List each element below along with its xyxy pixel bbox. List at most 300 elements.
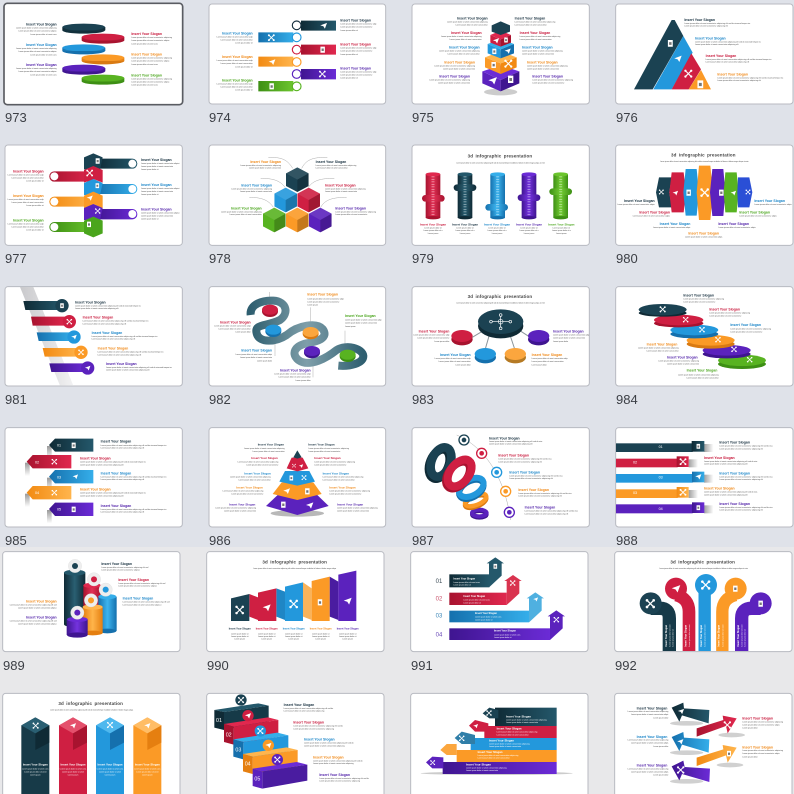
vertical column text: Lorem ipsum dolor sit amet [669, 624, 672, 647]
bar text: Lorem ipsum dolor sit [494, 636, 512, 639]
text blocks: Insert Your Slogan [509, 470, 540, 474]
left text blocks [215, 443, 285, 513]
text blocks: Insert Your Slogan [340, 43, 371, 47]
left text blocks: Insert Your Slogan [13, 194, 44, 198]
right text blocks: Insert Your Slogan [314, 456, 341, 460]
left text blocks: Lorem ipsum dolor sit amet consectetur adipiscing [628, 710, 668, 713]
right text blocks: Lorem ipsum dolor sit amet consectetur adipisc [131, 80, 170, 83]
subtitle: Lorem ipsum dolor sit amet consectetur adipiscing elit sed do eiusmod tempor incididunt ut labore et dolore magna aliqua ut enim [660, 160, 749, 163]
left text blocks [10, 600, 57, 625]
left text blocks: Lorem ipsum dolor sit amet consectetur adipiscing [16, 27, 57, 30]
slide 996: 3D arrows [615, 693, 792, 794]
right text blocks: Insert Your Slogan [101, 562, 132, 566]
left text blocks: Lorem ipsum dolor sit amet consectetur [246, 463, 279, 466]
left text blocks: Insert Your Slogan [250, 160, 281, 164]
text blocks: Lorem ipsum dolor sit amet consectetur adipiscing elit sed do [313, 759, 362, 762]
arrow shadows [670, 721, 745, 784]
slide 987: 3D rings [412, 428, 589, 527]
slide number captions: 976 [616, 110, 638, 125]
right text blocks: Lorem ipsum dolor sit amet consectetur adipiscing [520, 35, 560, 38]
right text blocks: Lorem ipsum dolor sit amet consectetur adipiscing [131, 36, 172, 39]
text blocks: Insert Your Slogan [92, 331, 122, 335]
right text blocks: Lorem ipsum dolor sit amet consectetur adipiscing [730, 327, 771, 330]
left text blocks: Insert Your Slogan [236, 485, 263, 489]
right text blocks: Lorem ipsum dolor sit amet consectetur adipisci [141, 211, 180, 214]
text blocks: Lorem ipsum dolor sit amet consectetur adipiscing elit sed do eiusmod tempor inc [75, 304, 141, 307]
right text blocks: Insert Your Slogan [730, 323, 761, 327]
right text blocks: Lorem ipsum dolor sit amet cons [131, 42, 158, 45]
columns [21, 717, 161, 794]
left text blocks: Lorem ipsum dolor sit amet consectetur adipiscing [244, 447, 285, 450]
left text blocks: Lorem ipsum dolor sit amet consectetur adipiscing [223, 490, 263, 493]
left text blocks: Insert Your Slogan [241, 349, 272, 353]
column text: Lorem ipsum [105, 775, 116, 777]
text blocks: Lorem ipsum dolor sit amet consectetur adipiscing elit sed do eiusmod tempor inc [717, 76, 783, 79]
text blocks: Lorem ipsum dolor sit amet consectetur adipiscing elit sed do eius [525, 510, 578, 513]
left text blocks: Lorem ipsum dolor sit amet consectetur adipiscing [16, 47, 57, 50]
left text blocks: Lorem ipsum dolor sit amet consectetur adipi [214, 324, 251, 327]
text blocks: Lorem ipsum dolor sit [340, 53, 358, 56]
text blocks: Lorem ipsum dolor sit amet consectetur adipiscing elit sed do [304, 742, 353, 745]
right text blocks: Lorem ipsum dolor [742, 728, 758, 730]
left text blocks: Insert Your Slogan [639, 211, 670, 215]
text blocks: Insert Your Slogan [484, 223, 510, 227]
right text blocks: Insert Your Slogan [329, 485, 356, 489]
right text blocks: Insert Your Slogan [308, 443, 335, 447]
slide 992: bent columns with circles [615, 552, 792, 652]
text blocks: Lorem ipsum dolor sit a [455, 229, 475, 232]
shadow [484, 89, 517, 95]
text blocks: Lorem ipsum dolor sit a [519, 229, 539, 232]
left text blocks: Lorem ipsum dolor sit amet consectetur adipis [653, 226, 690, 229]
bars [616, 441, 704, 513]
text blocks [684, 18, 783, 82]
left text blocks [16, 23, 57, 76]
blocks: 05 [254, 777, 260, 783]
slide number captions: 977 [5, 251, 27, 266]
text blocks: Lorem ipsum dolor sit amet consectetur [345, 322, 377, 325]
slide 991: up-arrow bars [411, 552, 588, 652]
left text blocks: Lorem ipsum dolor sit [26, 179, 44, 182]
left text blocks: Insert Your Slogan [231, 206, 262, 210]
title: 3d infographic presentation [58, 701, 123, 706]
left text blocks: Lorem ipsum dolor sit amet consectetur [253, 450, 285, 453]
text blocks: Lorem ipsum [556, 233, 567, 235]
left text blocks: Lorem ipsum dolor sit amet consectetur adipiscing [658, 359, 699, 362]
slide 973: stacked discs [4, 3, 183, 105]
right text blocks: Lorem ipsum dolor sit amet consectetur adipiscing [683, 298, 724, 301]
text blocks: Insert Your Slogan [489, 436, 520, 440]
left text blocks: Lorem ipsum dolor sit amet consectetur [687, 376, 719, 379]
left text blocks: Lorem ipsum dolor sit amet consectetur adipi [236, 353, 273, 356]
text blocks: Lorem ipsum dolor sit amet consectetur adipiscing elit [498, 460, 542, 463]
right text blocks: Lorem ipsum dolor sit amet consectetur adipis [718, 226, 756, 229]
row numbers: 01 [436, 579, 443, 585]
right text blocks: Lorem ipsum dolor sit amet consectetur adipis [739, 215, 777, 218]
right text blocks: Insert Your Slogan [532, 353, 562, 357]
bars: 02 [633, 460, 637, 464]
vertical column text: Lorem ipsum dolor sit amet [704, 624, 707, 647]
subtitle: Lorem ipsum dolor sit amet consectetur adipiscing elit sed do eiusmod tempor incididunt ut labore et dolore magna aliqua ut enim [456, 301, 546, 304]
column text: Lorem ipsum [30, 775, 41, 777]
left text blocks: Lorem ipsum dolor sit amet consectetur [221, 38, 253, 41]
right text blocks: Lorem ipsum dolor sit amet consectetur [329, 493, 362, 496]
text blocks: Insert Your Slogan [98, 347, 128, 351]
bar text: Lorem ipsum dolor sit amet cons [494, 633, 521, 636]
left text blocks: Insert Your Slogan [26, 616, 57, 620]
text blocks: Lorem ipsum dolor sit [520, 226, 538, 229]
slide number captions: 983 [412, 392, 434, 407]
text blocks: Lorem ipsum dolor sit amet consectetur adipiscing elit sed do eius [489, 440, 542, 443]
vertical column text: Insert Your Slogan [684, 624, 687, 647]
spokes [471, 331, 532, 350]
right text blocks: Lorem ipsum dolor sit amet consectetur adipiscing [742, 720, 783, 723]
column text: Lorem ipsum dolor sit amet cons [134, 767, 161, 770]
chain circles [292, 21, 301, 91]
text blocks: Lorem ipsum [345, 326, 356, 328]
vertical column text: Insert Your Slogan [665, 624, 668, 647]
slide 976: banded triangle [616, 4, 793, 104]
text blocks: Insert Your Slogan [684, 18, 715, 22]
text blocks: Lorem ipsum dolor sit amet consectetur [340, 26, 373, 29]
left text blocks: Insert Your Slogan [660, 222, 690, 226]
slide number captions: 988 [616, 533, 638, 548]
left text blocks: Lorem ipsum dolor sit amet consectetur adipiscing [628, 739, 668, 742]
columns [651, 590, 761, 651]
right text blocks: Lorem ipsum dolor sit amet consectetur [553, 337, 585, 340]
left text blocks: Lorem ipsum dolor sit amet consectetur adipiscing [638, 346, 679, 349]
column text: Lorem ipsum dolor sit amet cons [22, 767, 49, 770]
slide 975: stacked hexagonal boxes [412, 4, 589, 104]
text blocks: Insert Your Slogan [719, 502, 750, 506]
right text blocks: Insert Your Slogan [131, 73, 162, 77]
right text blocks: Insert Your Slogan [131, 53, 162, 57]
right text blocks: Lorem ipsum dolor sit amet consectetur adipiscing [131, 77, 172, 80]
text blocks: Lorem ipsum dolor sit amet consectetur adipiscing elit [101, 447, 145, 450]
left text blocks: Lorem ipsum dolor sit amet consectetur [450, 38, 482, 41]
subtitle: Lorem ipsum dolor sit amet consectetur adipiscing elit sed do eiusmod tempor incididunt ut labore et dolore magna aliqua ut enim [456, 162, 546, 165]
left text blocks [617, 199, 690, 229]
right text blocks [718, 199, 792, 229]
text blocks: Lorem ipsum dolor sit amet consectetur adipiscing elit sed do eiusmod tempor inc [106, 366, 172, 369]
slide 974: ribbons on a chain [209, 4, 386, 104]
vertical column text: Insert Your Slogan [718, 624, 721, 647]
left text blocks [221, 160, 281, 216]
text blocks: Lorem ipsum dolor sit amet consectetur adipiscing elit [509, 477, 553, 480]
text blocks: Insert Your Slogan [704, 456, 735, 460]
left text blocks: Insert Your Slogan [222, 31, 253, 35]
text blocks: Lorem ipsum dolor sit amet consectetur adipiscing elit [706, 61, 750, 64]
row numbers [436, 579, 443, 638]
right text blocks: Insert Your Slogan [522, 46, 553, 50]
path through markers [457, 435, 511, 520]
left text blocks: Insert Your Slogan [222, 78, 253, 82]
satellite discs [451, 330, 549, 363]
title: 3d infographic presentation [468, 154, 532, 159]
text blocks: Insert Your Slogan [525, 506, 555, 510]
slide number captions: 990 [207, 658, 229, 673]
text blocks: Lorem ipsum dolor sit amet consectetur adipiscing [325, 187, 366, 190]
tags: 01 [57, 444, 61, 448]
bar text: Insert Your Slogan [494, 630, 516, 633]
text blocks: Lorem ipsum dolor sit amet consectetur adipi [307, 297, 344, 300]
text blocks: Insert Your Slogan [316, 160, 346, 164]
right text blocks: Lorem ipsum dolor sit amet consectetur [323, 479, 355, 482]
left text blocks: Lorem ipsum dolor sit amet consectetur adip [413, 334, 449, 337]
right text blocks: Lorem ipsum dolor sit amet consectetur [522, 53, 554, 56]
left text blocks: Lorem ipsum dolor sit amet consectetur adip [435, 357, 471, 360]
right text blocks: Insert Your Slogan [532, 74, 563, 78]
text blocks: Lorem ipsum dolor sit amet consectetur adipiscing elit sed do eiusmod tempor inc [101, 475, 167, 478]
bar text: Lorem ipsum dolor sit amet consectetur [478, 757, 510, 760]
text blocks: Lorem ipsum dolor sit [340, 77, 358, 80]
text blocks [75, 300, 172, 372]
triangle bands [634, 20, 711, 89]
text blocks: Lorem ipsum dolor sit [339, 632, 357, 635]
column text [22, 763, 161, 777]
text blocks: Insert Your Slogan [340, 19, 371, 23]
left text blocks [8, 169, 44, 232]
left text blocks: Lorem ipsum dolor sit amet consectetur adipis [617, 203, 655, 206]
row numbers: 03 [436, 614, 443, 620]
left text blocks: Lorem ipsum dolor sit amet consectetur adipisc [18, 70, 57, 73]
text blocks: Lorem ipsum dolor sit amet consectetur adipiscing elit [101, 478, 145, 481]
right text blocks: Insert Your Slogan [131, 32, 162, 36]
text blocks: Lorem ipsum dolor sit amet consectetur adipiscing elit sed do eiusmod tempor inc [101, 444, 167, 447]
text blocks: Lorem ipsum dolor sit amet consectetur adipiscing [313, 762, 354, 765]
left text blocks: Insert Your Slogan [637, 735, 667, 739]
text blocks: Lorem ipsum dolor sit amet consectetur adipiscing elit sed do eiusmod tempor inc [80, 461, 146, 464]
right text blocks: Lorem ipsum dolor sit amet consectetur adipiscing [337, 507, 378, 510]
text blocks: Lorem ipsum dolor sit amet consectetur adipiscing elit [719, 478, 763, 481]
right text blocks: Lorem ipsum dolor sit amet consectetur adipiscing [314, 460, 355, 463]
pins [235, 694, 283, 765]
text blocks: Insert Your Slogan [304, 738, 335, 742]
diagonal band [20, 287, 73, 386]
slide 995: staircase arrow bars [411, 693, 588, 794]
left text blocks: Lorem ipsum dolor sit amet consectetur adipiscing elit sed [10, 604, 57, 607]
bars: 04 [659, 507, 663, 511]
left text blocks: Lorem ipsum dolor sit amet consectetur adipis [631, 742, 668, 745]
right text blocks: Lorem ipsum dolor sit amet consectetur adipisci [123, 603, 162, 606]
left text blocks [638, 342, 719, 379]
text blocks: Lorem ipsum dolor sit amet consectetur adipiscing elit sed do eius [704, 460, 757, 463]
bar text: Insert Your Slogan [475, 612, 497, 615]
bar text: Insert Your Slogan [506, 714, 531, 718]
left text blocks: Lorem ipsum dolor sit amet consectetur adipiscing [240, 164, 281, 167]
subtitle: Lorem ipsum dolor sit amet consectetur adipiscing elit sed do eiusmod tempor incididunt ut labore et dolore magna aliqua ut enim [659, 567, 749, 570]
text blocks: Lorem ipsum dolor sit amet consectetur adipiscing elit [98, 353, 142, 356]
slide number captions: 974 [209, 110, 231, 125]
text blocks: Lorem ipsum dolor sit [340, 29, 358, 32]
column text: Insert Your Slogan [98, 763, 123, 767]
left text blocks: Lorem ipsum dolor sit [235, 65, 253, 68]
left text blocks: Insert Your Slogan [258, 443, 284, 447]
blocks: 04 [245, 761, 251, 767]
column text: Lorem ipsum dolor sit amet [99, 770, 122, 773]
right text blocks: Lorem ipsum dolor sit amet cons [131, 84, 158, 87]
bar text: Lorem ipsum dolor sit [475, 618, 493, 621]
ribbons [258, 21, 336, 91]
text blocks: Insert Your Slogan [719, 441, 750, 445]
text blocks: Lorem ipsum dolor sit amet consectetur adipiscing elit sed do eiusmod tempor inc [92, 335, 158, 338]
left text blocks: Lorem ipsum dolor sit amet consectetur adipiscing [231, 187, 272, 190]
slide number captions [3, 110, 638, 673]
bar text [453, 577, 521, 639]
column text: Lorem ipsum dolor sit amet [24, 770, 47, 773]
left text blocks: Insert Your Slogan [449, 46, 480, 50]
bar text: Insert Your Slogan [466, 762, 491, 766]
text blocks: Lorem ipsum dolor sit amet consectetur adipiscing elit [106, 369, 150, 372]
text blocks: Lorem ipsum dolor sit amet consectetur [307, 300, 340, 303]
text blocks: Insert Your Slogan [80, 457, 111, 461]
left text blocks: Lorem ipsum dolor sit amet consectetur adip [217, 35, 253, 38]
text blocks: Lorem ipsum dolor sit amet consectetur adipiscing elit sed do eiusmod tempor inc [98, 351, 164, 354]
left text blocks: Lorem ipsum dolor sit amet consectetur adipisci [18, 606, 57, 609]
slide 982: S-curve ribbon [209, 287, 386, 386]
bar text: Lorem ipsum dolor sit amet consectetur [506, 721, 538, 724]
right text blocks: Lorem ipsum dolor sit amet consectetur [520, 38, 552, 41]
column text: Insert Your Slogan [61, 763, 86, 767]
slide 978: cube honeycomb [209, 145, 386, 245]
text blocks: Insert Your Slogan [293, 721, 324, 725]
text blocks: Lorem ipsum dolor sit [312, 635, 330, 638]
bar text: Lorem ipsum dolor sit amet consectetur adipiscing [478, 754, 518, 757]
left text blocks: Lorem ipsum dolor sit amet consectetur [239, 479, 271, 482]
left text blocks: Lorem ipsum dolor sit amet consectetur adipiscing elit sed [10, 620, 57, 623]
text blocks [704, 441, 773, 512]
text blocks: Lorem ipsum dolor sit a [487, 229, 507, 232]
right text blocks [683, 293, 771, 333]
bar text: Lorem ipsum dolor sit amet consectetur [489, 745, 521, 748]
left text blocks: Lorem ipsum dolor sit amet consectetur [438, 81, 470, 84]
text blocks: Insert Your Slogan [518, 488, 549, 492]
left text blocks [429, 16, 488, 84]
text blocks: Insert Your Slogan [335, 206, 366, 210]
text blocks: Lorem ipsum dolor sit amet consectetur adipiscing elit sed do eiusmod tempor inc [695, 40, 761, 43]
slide number captions: 984 [616, 392, 638, 407]
right text blocks: Insert Your Slogan [520, 31, 550, 35]
left text blocks: Insert Your Slogan [667, 355, 698, 359]
left text blocks [413, 330, 471, 366]
bars [443, 708, 557, 774]
right text blocks: Lorem ipsum dolor sit amet consectetur [683, 301, 716, 304]
left text blocks: Lorem ipsum dolor [653, 746, 669, 748]
text blocks: Insert Your Slogan [325, 183, 356, 187]
text blocks: Insert Your Slogan [75, 300, 106, 304]
text blocks: Lorem ipsum dolor sit amet consectetur adipiscing elit sed do eius [498, 458, 552, 461]
right text blocks: Lorem ipsum dolor sit amet consectetur adipiscing [323, 476, 363, 479]
left text blocks: Lorem ipsum dolor sit amet consectetur adipiscing [215, 507, 256, 510]
column text: Lorem ipsum dolor sit amet [136, 770, 159, 773]
left text blocks: Lorem ipsum dolor sit amet consectetur adipiscing [447, 20, 488, 23]
left text blocks: Lorem ipsum dolor sit amet consectetur [231, 493, 264, 496]
right text blocks: Lorem ipsum dolor [532, 364, 547, 366]
text blocks: Insert Your Slogan [717, 72, 748, 76]
text blocks: Lorem ipsum [315, 639, 326, 641]
text blocks: Lorem ipsum dolor sit amet consectetur adipiscing elit [489, 443, 533, 446]
text blocks: Insert Your Slogan [229, 627, 251, 630]
left text blocks: Insert Your Slogan [439, 74, 470, 78]
marker circles [459, 435, 514, 517]
text blocks: Lorem ipsum dolor sit amet consectetur adipiscing [335, 210, 376, 213]
arrows [449, 557, 565, 640]
left text blocks: Insert Your Slogan [280, 369, 311, 373]
text blocks: Lorem ipsum dolor sit amet consectetur adipiscing elit sed do eius [509, 474, 563, 477]
blocks: 02 [226, 733, 232, 739]
slide 980: hexagonal fan columns [616, 145, 793, 245]
row numbers: 02 [436, 597, 443, 603]
text blocks: Lorem ipsum dolor sit [488, 226, 506, 229]
bar text: Lorem ipsum dolor sit [453, 584, 471, 587]
right text blocks [308, 443, 378, 513]
text blocks: Lorem ipsum dolor sit amet consectetur adipiscing elit [719, 509, 763, 512]
blocks: 03 [235, 747, 241, 753]
text blocks [489, 436, 578, 515]
left text blocks [214, 320, 311, 382]
tags [27, 439, 93, 516]
right text blocks: Insert Your Slogan [527, 60, 558, 64]
column text: Lorem ipsum dolor sit amet cons [60, 767, 86, 770]
left text blocks: Lorem ipsum dolor sit amet consectetur [230, 213, 262, 216]
S ribbon [251, 301, 363, 366]
text blocks: Lorem ipsum dolor sit [312, 632, 330, 635]
text blocks: Insert Your Slogan [256, 627, 278, 630]
text blocks: Lorem ipsum dolor sit amet consectetur adipiscing elit sed do eius [518, 492, 572, 495]
right text blocks: Lorem ipsum dolor sit amet consectetur adipisci [118, 585, 158, 588]
right text blocks: Lorem ipsum dolor sit amet consectetur [308, 450, 341, 453]
right text blocks: Insert Your Slogan [718, 222, 749, 226]
left text blocks: Lorem ipsum dolor sit amet consectetur [456, 23, 488, 26]
center text block: Insert Your Slogan [688, 231, 719, 235]
blocks: 01 [216, 718, 222, 724]
icon badges [68, 559, 112, 619]
rings [425, 444, 488, 518]
left text blocks: Lorem ipsum dolor sit amet consectetur [667, 362, 699, 365]
text blocks: Lorem ipsum [428, 233, 439, 235]
left text blocks: Lorem ipsum dolor sit amet consectetur [224, 510, 256, 513]
left text blocks: Lorem ipsum dolor sit amet consectetur adipis [633, 215, 670, 218]
text blocks: Lorem ipsum dolor sit [456, 226, 474, 229]
bars: 03 [659, 476, 663, 480]
right text blocks: Lorem ipsum dolor sit amet consectetur adipiscing [532, 78, 573, 81]
left text blocks: Lorem ipsum dolor sit [26, 204, 44, 207]
text blocks: Lorem ipsum dolor sit [285, 632, 303, 635]
left text blocks: Insert Your Slogan [229, 502, 255, 506]
left text blocks: Lorem ipsum dolor [434, 341, 450, 343]
slide 994: stepped 3D blocks [207, 693, 384, 794]
text blocks: Lorem ipsum dolor sit amet consectetur adip [340, 47, 376, 50]
text blocks: Lorem ipsum dolor sit amet consectetur adipiscing elit [80, 494, 124, 497]
text blocks: Lorem ipsum dolor sit amet consectetur adipiscing elit [75, 307, 119, 310]
column text: Lorem ipsum dolor sit amet [62, 770, 85, 773]
bars: 01 [659, 445, 663, 449]
left text blocks: Lorem ipsum dolor sit amet cons [30, 73, 57, 76]
left text blocks: Insert Your Slogan [26, 23, 57, 27]
left text blocks: Lorem ipsum dolor sit amet consectetur [221, 85, 253, 88]
text blocks: Insert Your Slogan [101, 440, 131, 444]
slide 983: hub and spokes [412, 287, 589, 386]
right text blocks: Lorem ipsum dolor sit amet consectetur adipiscing [131, 57, 172, 60]
vertical column text: Insert Your Slogan [700, 624, 703, 647]
text blocks: Lorem ipsum dolor sit [285, 635, 303, 638]
right text blocks: Lorem ipsum dolor sit amet consectetur adipisc [131, 60, 170, 63]
title: 3d infographic presentation [262, 560, 327, 565]
cubes [263, 167, 332, 232]
text blocks: Lorem ipsum dolor sit [339, 635, 357, 638]
right text blocks: Lorem ipsum dolor sit amet consectetur adipiscing [742, 749, 783, 752]
text blocks: Lorem ipsum [460, 233, 471, 235]
